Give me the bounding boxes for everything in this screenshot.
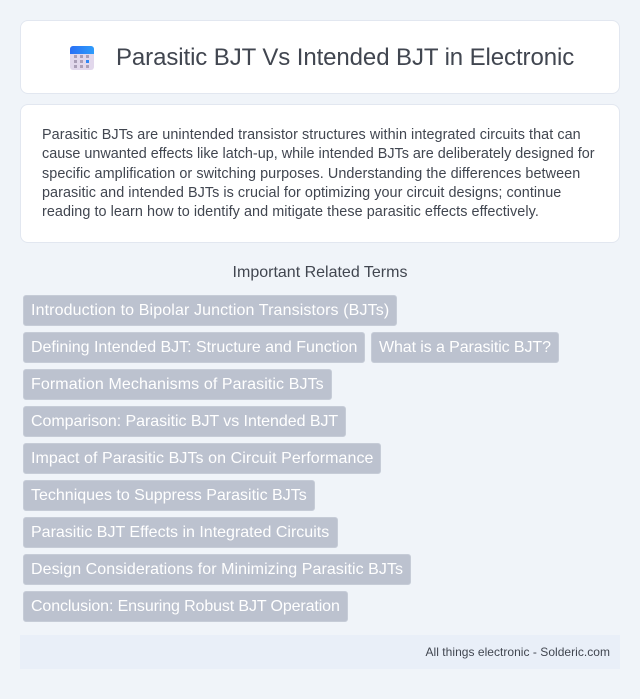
intro paragraph: parasitic and intended BJTs is crucial for optimizing your circuit designs; continue: [42, 185, 561, 201]
footer: [20, 635, 620, 669]
tag: introduction: [23, 295, 397, 326]
panel: header card: [20, 20, 620, 94]
intro paragraph: Parasitic BJTs are unintended transistor structures within integrated circuits that can: [42, 127, 581, 143]
title: Parasitic BJT Vs Intended BJT in Electronic: [116, 44, 574, 71]
heading: important related terms: Important Related Terms: [233, 264, 407, 281]
tag: defining intended BJT: Defining Intended BJT: Structure and Function: [31, 339, 357, 356]
tag: formation mechanisms: Formation Mechanisms of Parasitic BJTs: [31, 376, 324, 393]
tag: conclusion: [23, 591, 348, 622]
panel: related term tags: [23, 295, 559, 622]
intro paragraph: [42, 127, 595, 220]
intro paragraph: cause unwanted effects like latch-up, while intended BJTs are deliberately designed for: [42, 146, 595, 162]
tag: suppression techniques: [23, 480, 315, 511]
tag: impact on performance: [23, 443, 381, 474]
footer credit: All things electronic - Solderic.com: [426, 645, 610, 659]
tag: design considerations: [23, 554, 411, 585]
tag: what is a parasitic BJT: What is a Parasitic BJT?: [379, 339, 551, 356]
intro paragraph: specific amplification or switching purposes. Understanding the differences between: [42, 166, 580, 182]
tag: suppression techniques: Techniques to Suppress Parasitic BJTs: [31, 487, 307, 504]
tag: design considerations: Design Considerations for Minimizing Parasitic BJTs: [31, 561, 403, 578]
tag: what is a parasitic BJT: [371, 332, 559, 363]
tag: impact on performance: Impact of Parasitic BJTs on Circuit Performance: [31, 450, 374, 467]
tag: effects in integrated circuits: Parasitic BJT Effects in Integrated Circuits: [31, 524, 329, 541]
tag: effects in integrated circuits: [23, 517, 338, 548]
panel: intro text card: [20, 104, 620, 243]
tag: comparison: [23, 406, 346, 437]
tag: comparison: Comparison: Parasitic BJT vs Intended BJT: [31, 413, 338, 430]
icon: calendar grid: [70, 46, 94, 70]
tag: conclusion: Conclusion: Ensuring Robust BJT Operation: [31, 598, 340, 615]
tag: formation mechanisms: [23, 369, 332, 400]
intro paragraph: reading to learn how to identify and mitigate these parasitic effects effectively.: [42, 204, 539, 220]
tag: introduction: Introduction to Bipolar Junction Transistors (BJTs): [31, 302, 389, 319]
tag: defining intended BJT: [23, 332, 365, 363]
